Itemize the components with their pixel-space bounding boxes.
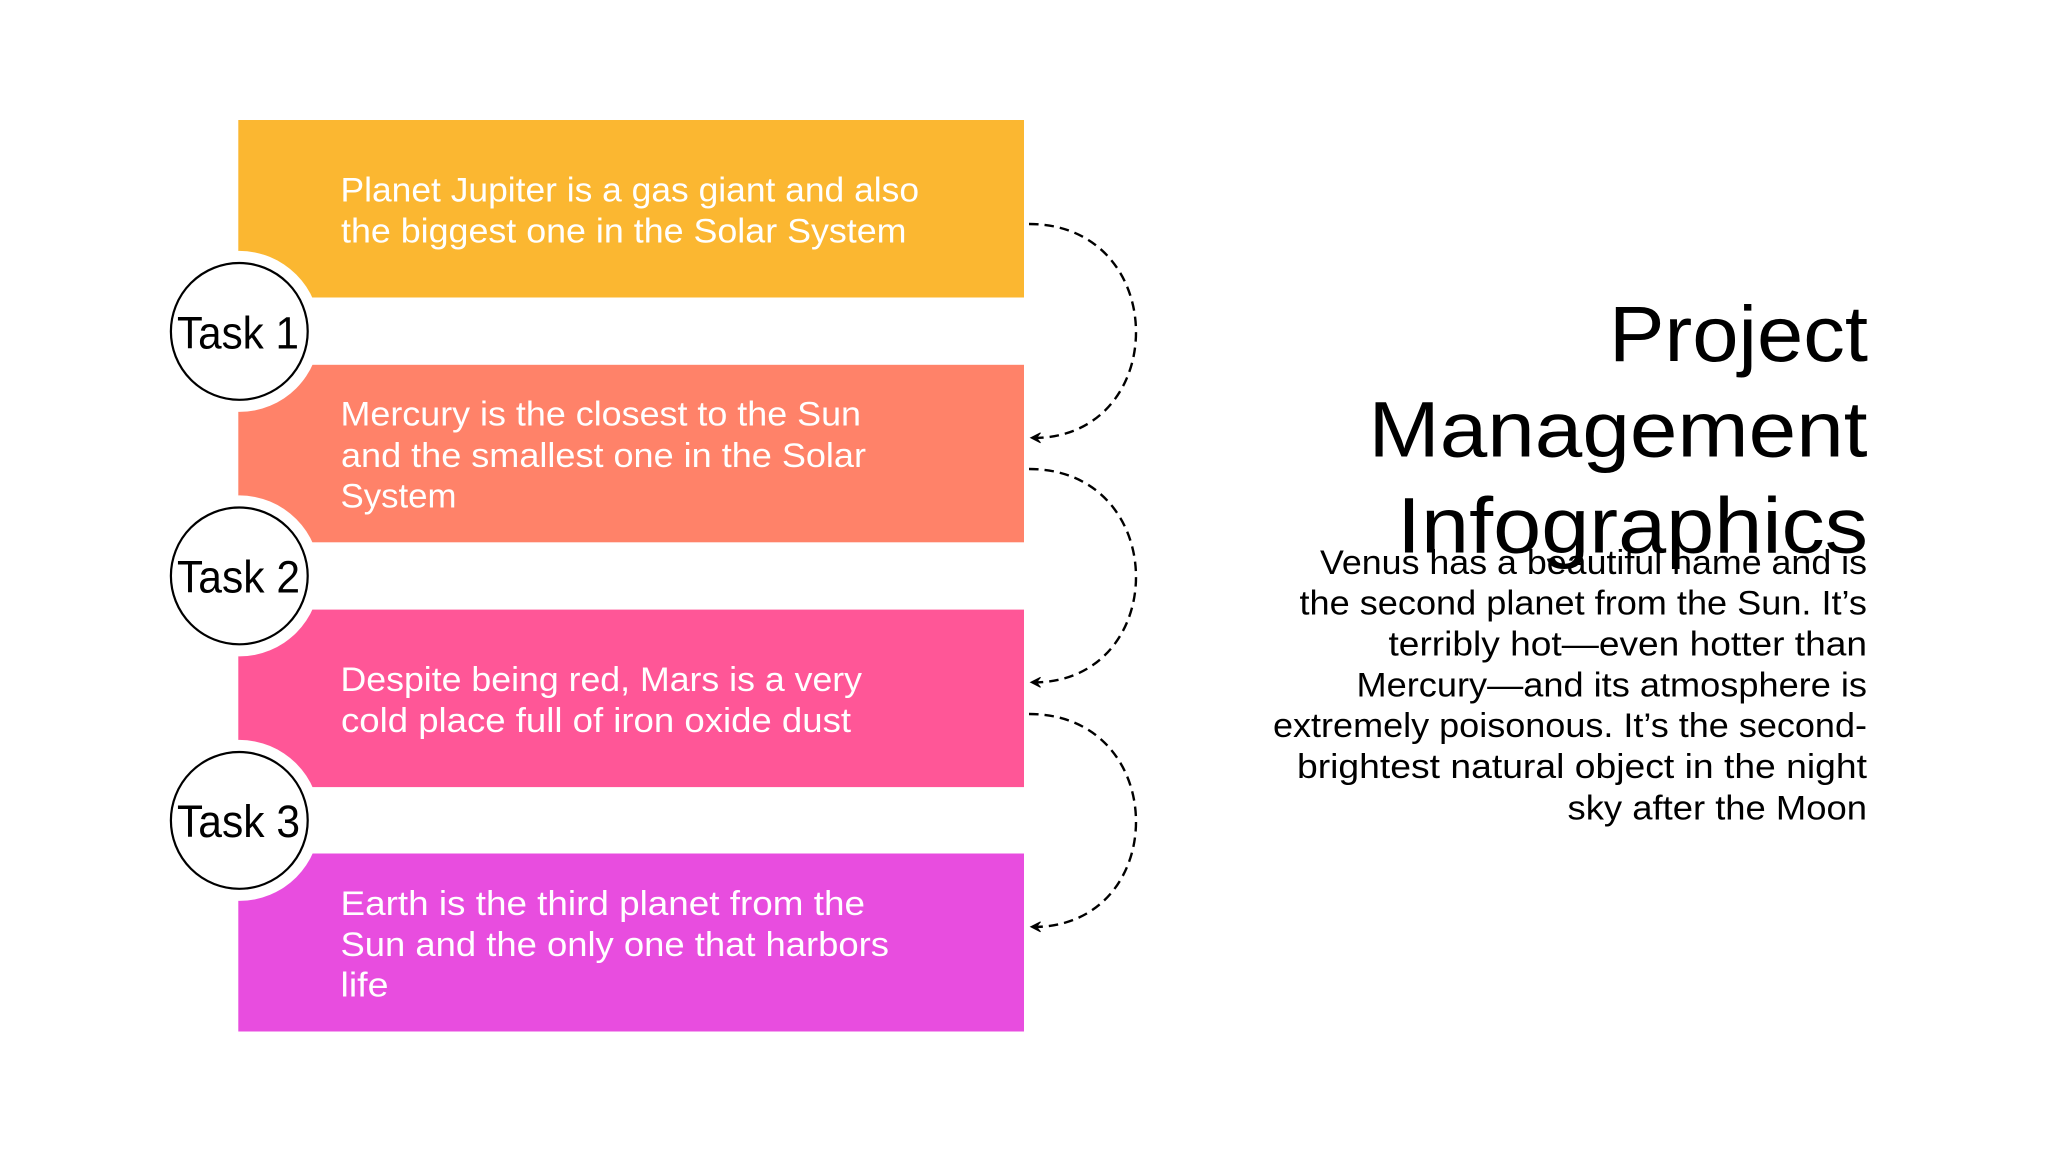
arrow: Mars to Earth [1029,714,1136,932]
text block: Venus description: extremely poisonous. It’s the second- [1273,707,1867,745]
text: Mercury description: System [340,478,456,516]
text block: Venus description: sky after the Moon [1568,789,1867,827]
badge: Task 3 [159,740,320,901]
badge: Task 1: Task 1 [177,307,299,358]
text block: Venus description: terribly hot—even hotter than [1388,626,1867,664]
text block: Venus description: Mercury—and its atmosphere is [1356,667,1867,705]
title [1368,289,1868,569]
text: Earth description: Sun and the only one that harbors [340,926,889,964]
text: Earth description: life [340,967,388,1005]
text: Mercury description: and the smallest one in the Solar [341,437,866,475]
panel: Earth bar [238,854,1024,1032]
text: Mars description: Despite being red, Mars is a very [340,661,862,699]
title: Project [1609,289,1868,378]
arrow: Jupiter to Mercury [1029,224,1136,443]
badge: Task 2 [159,495,320,656]
text: Mars description [340,661,862,740]
text: Earth description [340,885,889,1005]
panel: Mercury bar [238,365,1024,542]
title: Management [1368,385,1868,474]
badge: Task 3: Task 3 [177,796,300,847]
text block: Venus description: the second planet from the Sun. It’s [1300,584,1867,622]
text: Jupiter description: the biggest one in the Solar System [341,213,906,251]
title: Infographics [1397,480,1868,569]
panel: Jupiter bar [238,120,1024,298]
badge: Task 1 [159,251,320,412]
text: Mercury description: Mercury is the closest to the Sun [340,396,861,434]
text block: Venus description [1273,544,1868,827]
arrow: Mercury to Mars [1029,469,1136,687]
text: Mercury description [340,396,866,516]
text: Jupiter description [340,172,919,251]
badge: Task 2: Task 2 [177,552,300,602]
text block: Venus description: brightest natural object in the night [1297,748,1868,786]
text: Jupiter description: Planet Jupiter is a gas giant and also [340,172,919,210]
text: Mars description: cold place full of iron oxide dust [341,702,852,740]
text: Earth description: Earth is the third planet from the [340,885,865,923]
text block: Venus description: Venus has a beautiful name and is [1320,544,1867,582]
panel: Mars bar [238,610,1024,787]
